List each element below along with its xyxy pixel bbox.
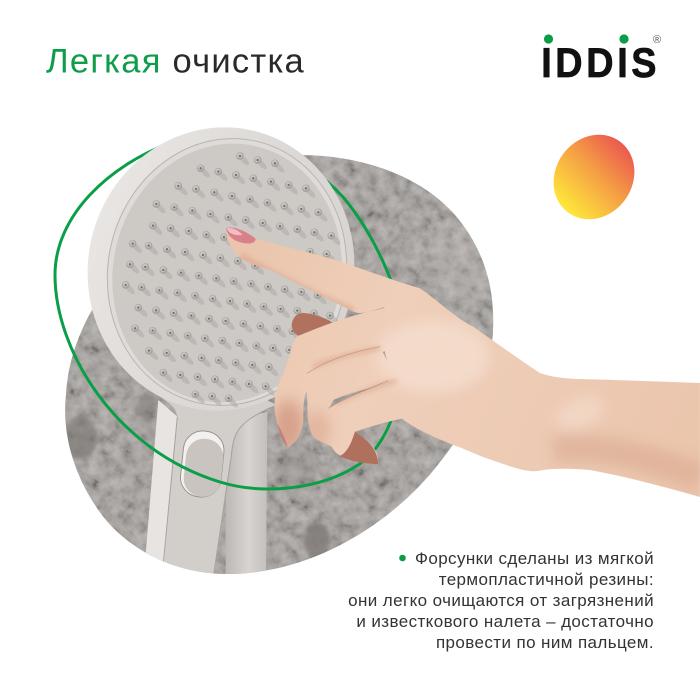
gradient blob accent (537, 119, 651, 235)
handle right side (226, 412, 267, 580)
finger underside shade (240, 257, 353, 312)
middle finger nail (277, 423, 288, 447)
hand (226, 228, 700, 497)
head outer shell (61, 102, 381, 436)
stone texture circle (65, 155, 494, 574)
middle fingertip shade (273, 400, 303, 453)
hand skin silhouette (226, 233, 700, 497)
shower handle (146, 396, 275, 574)
crease shade one (313, 348, 380, 367)
finger creases (307, 347, 388, 408)
bullet (399, 555, 406, 561)
description text: они легко очищаются от загрязнений (348, 591, 654, 610)
logo: IDDIS: IDDIS (541, 40, 657, 86)
description text: провести по ним пальцем. (436, 633, 654, 652)
back of hand highlight (377, 320, 490, 393)
thumb (292, 313, 337, 336)
description text: Форсунки сделаны из мягкой (415, 549, 654, 568)
title: Легкая очистка (46, 42, 305, 80)
description text: и известкового налета – достаточно (356, 612, 654, 631)
head face (88, 122, 366, 424)
handle button (179, 429, 226, 499)
shower head (61, 102, 381, 436)
pinky nail side (340, 432, 378, 464)
arm shadow band (553, 448, 700, 477)
logo: IDDIS: ® (653, 34, 661, 46)
ring finger shade (307, 412, 330, 448)
head rim line (83, 116, 371, 428)
wrist highlight (558, 396, 602, 430)
handle left side (146, 400, 177, 570)
description text: термопластичной резины: (439, 570, 654, 589)
handle front (158, 396, 275, 574)
fingernail (226, 227, 256, 244)
crease shade two (337, 381, 397, 403)
description text (348, 549, 654, 652)
green outline curve (55, 136, 405, 489)
nozzles (122, 152, 342, 409)
